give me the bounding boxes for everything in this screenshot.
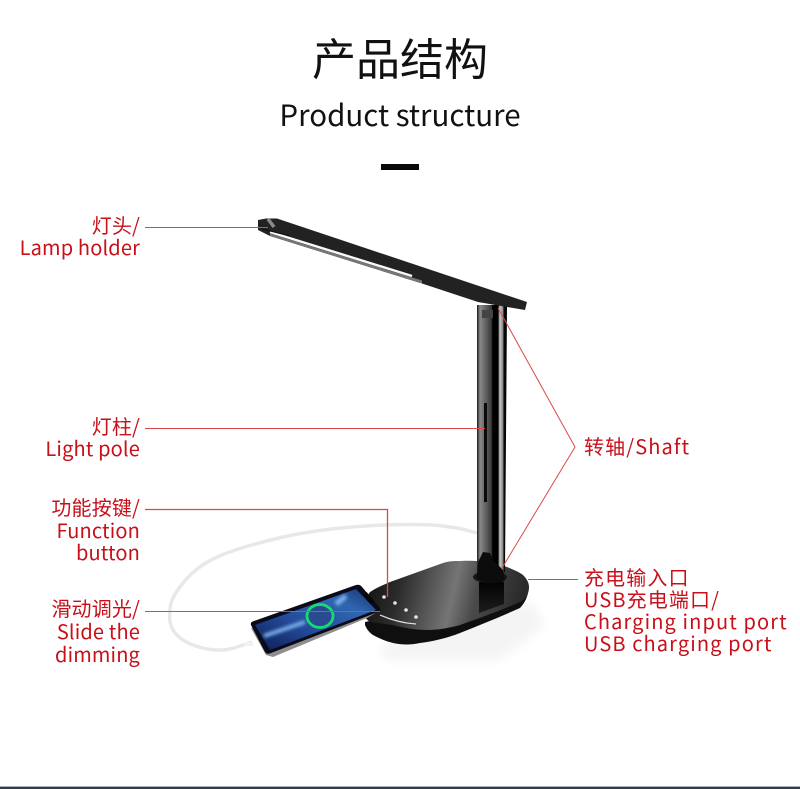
label: function button: 功能按键/ [51, 492, 140, 521]
label: lamp holder: Lamp holder [20, 232, 140, 261]
label: USB charging port [584, 562, 788, 657]
screen highlights [264, 596, 346, 636]
label: function button: button [76, 537, 140, 566]
label: USB charging port: USB charging port [584, 628, 772, 657]
label: USB charging port: USB充电端口/ [584, 584, 720, 613]
charging cable [170, 524, 477, 650]
heading accent bar [381, 164, 419, 170]
label: lamp holder [20, 210, 140, 261]
label: slide the dimming [51, 593, 140, 668]
lamp illustration [170, 218, 545, 660]
wireless charging ring [307, 604, 333, 628]
phone [244, 585, 381, 657]
pole [477, 305, 507, 583]
label: shaft: 转轴/Shaft [584, 431, 690, 460]
leader lines [145, 228, 578, 612]
label: slide the dimming: dimming [55, 639, 140, 668]
base [365, 561, 529, 644]
label: light pole: Light pole [45, 433, 140, 462]
label: lamp holder: 灯头/ [92, 210, 140, 239]
label: function button [51, 492, 140, 566]
charging plug [244, 642, 253, 646]
label: light pole [45, 411, 140, 462]
title: 产品结构 [312, 24, 488, 88]
label: function button: Function [56, 515, 140, 544]
label: light pole: 灯柱/ [92, 411, 140, 440]
base shadow [380, 600, 545, 660]
label: slide the dimming: 滑动调光/ [51, 593, 140, 622]
lamp head [258, 218, 527, 318]
label: USB charging port: 充电输入口 [584, 562, 690, 591]
label: slide the dimming: Slide the [57, 616, 140, 645]
subtitle: Product structure [279, 93, 521, 135]
touch buttons [380, 595, 418, 624]
pole collar [473, 571, 507, 583]
base reflection [479, 582, 504, 613]
bottom border [0, 786, 800, 789]
label: USB charging port: Charging input port [584, 606, 788, 635]
